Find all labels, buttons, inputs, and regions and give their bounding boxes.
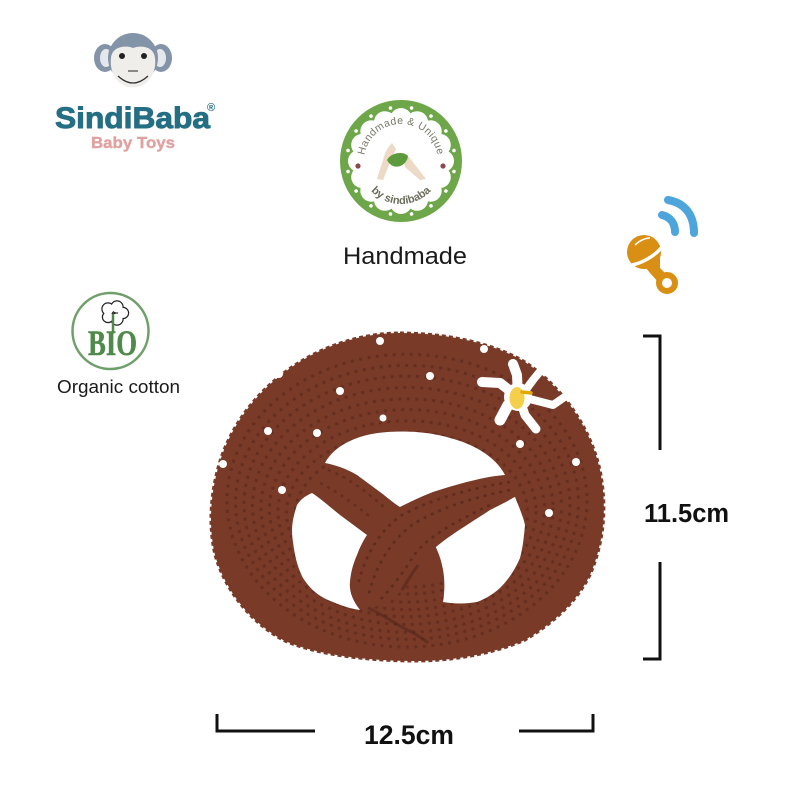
label: Handmade: Handmade (343, 243, 467, 270)
label: Organic cotton: Organic cotton (57, 376, 180, 397)
strand stitches (320, 470, 385, 518)
flower (482, 364, 569, 429)
white sprinkles (219, 337, 580, 517)
bracket: width right (519, 714, 593, 731)
badge: handmade and unique (340, 100, 462, 222)
rattle body (627, 235, 661, 269)
badge bottom text: by sindibaba (372, 186, 431, 204)
crease lines (368, 565, 428, 643)
logo: SindiBaba Baby Toys (55, 33, 215, 152)
knot stitches (358, 482, 510, 602)
bracket: height bottom (643, 562, 660, 659)
tagline: Baby Toys (91, 135, 175, 152)
badge top text: Handmade & Unique (358, 116, 442, 154)
icon: hearts (355, 163, 446, 169)
label: height: 11.5cm (644, 500, 729, 528)
pretzel ring (211, 333, 604, 661)
bracket: height top (643, 336, 660, 450)
icon: cotton plant (102, 302, 128, 332)
brand name: SindiBaba (55, 102, 210, 135)
bracket: width left (217, 714, 315, 731)
icon: monkey face (94, 33, 172, 88)
rattle ring (659, 275, 675, 291)
knot strand (350, 477, 516, 608)
icon: rattle with sound waves (627, 200, 694, 291)
left hole (292, 493, 367, 610)
BIO text: BIO (88, 323, 137, 363)
icon: hands and leaf (377, 143, 426, 180)
label: width: 12.5cm (364, 720, 454, 750)
sound waves (662, 200, 694, 233)
badge: BIO (72, 293, 148, 369)
right hole (433, 497, 525, 604)
upper hole (325, 431, 505, 507)
product photo: crochet pretzel toy (211, 333, 604, 661)
registered mark: ® (207, 102, 215, 114)
